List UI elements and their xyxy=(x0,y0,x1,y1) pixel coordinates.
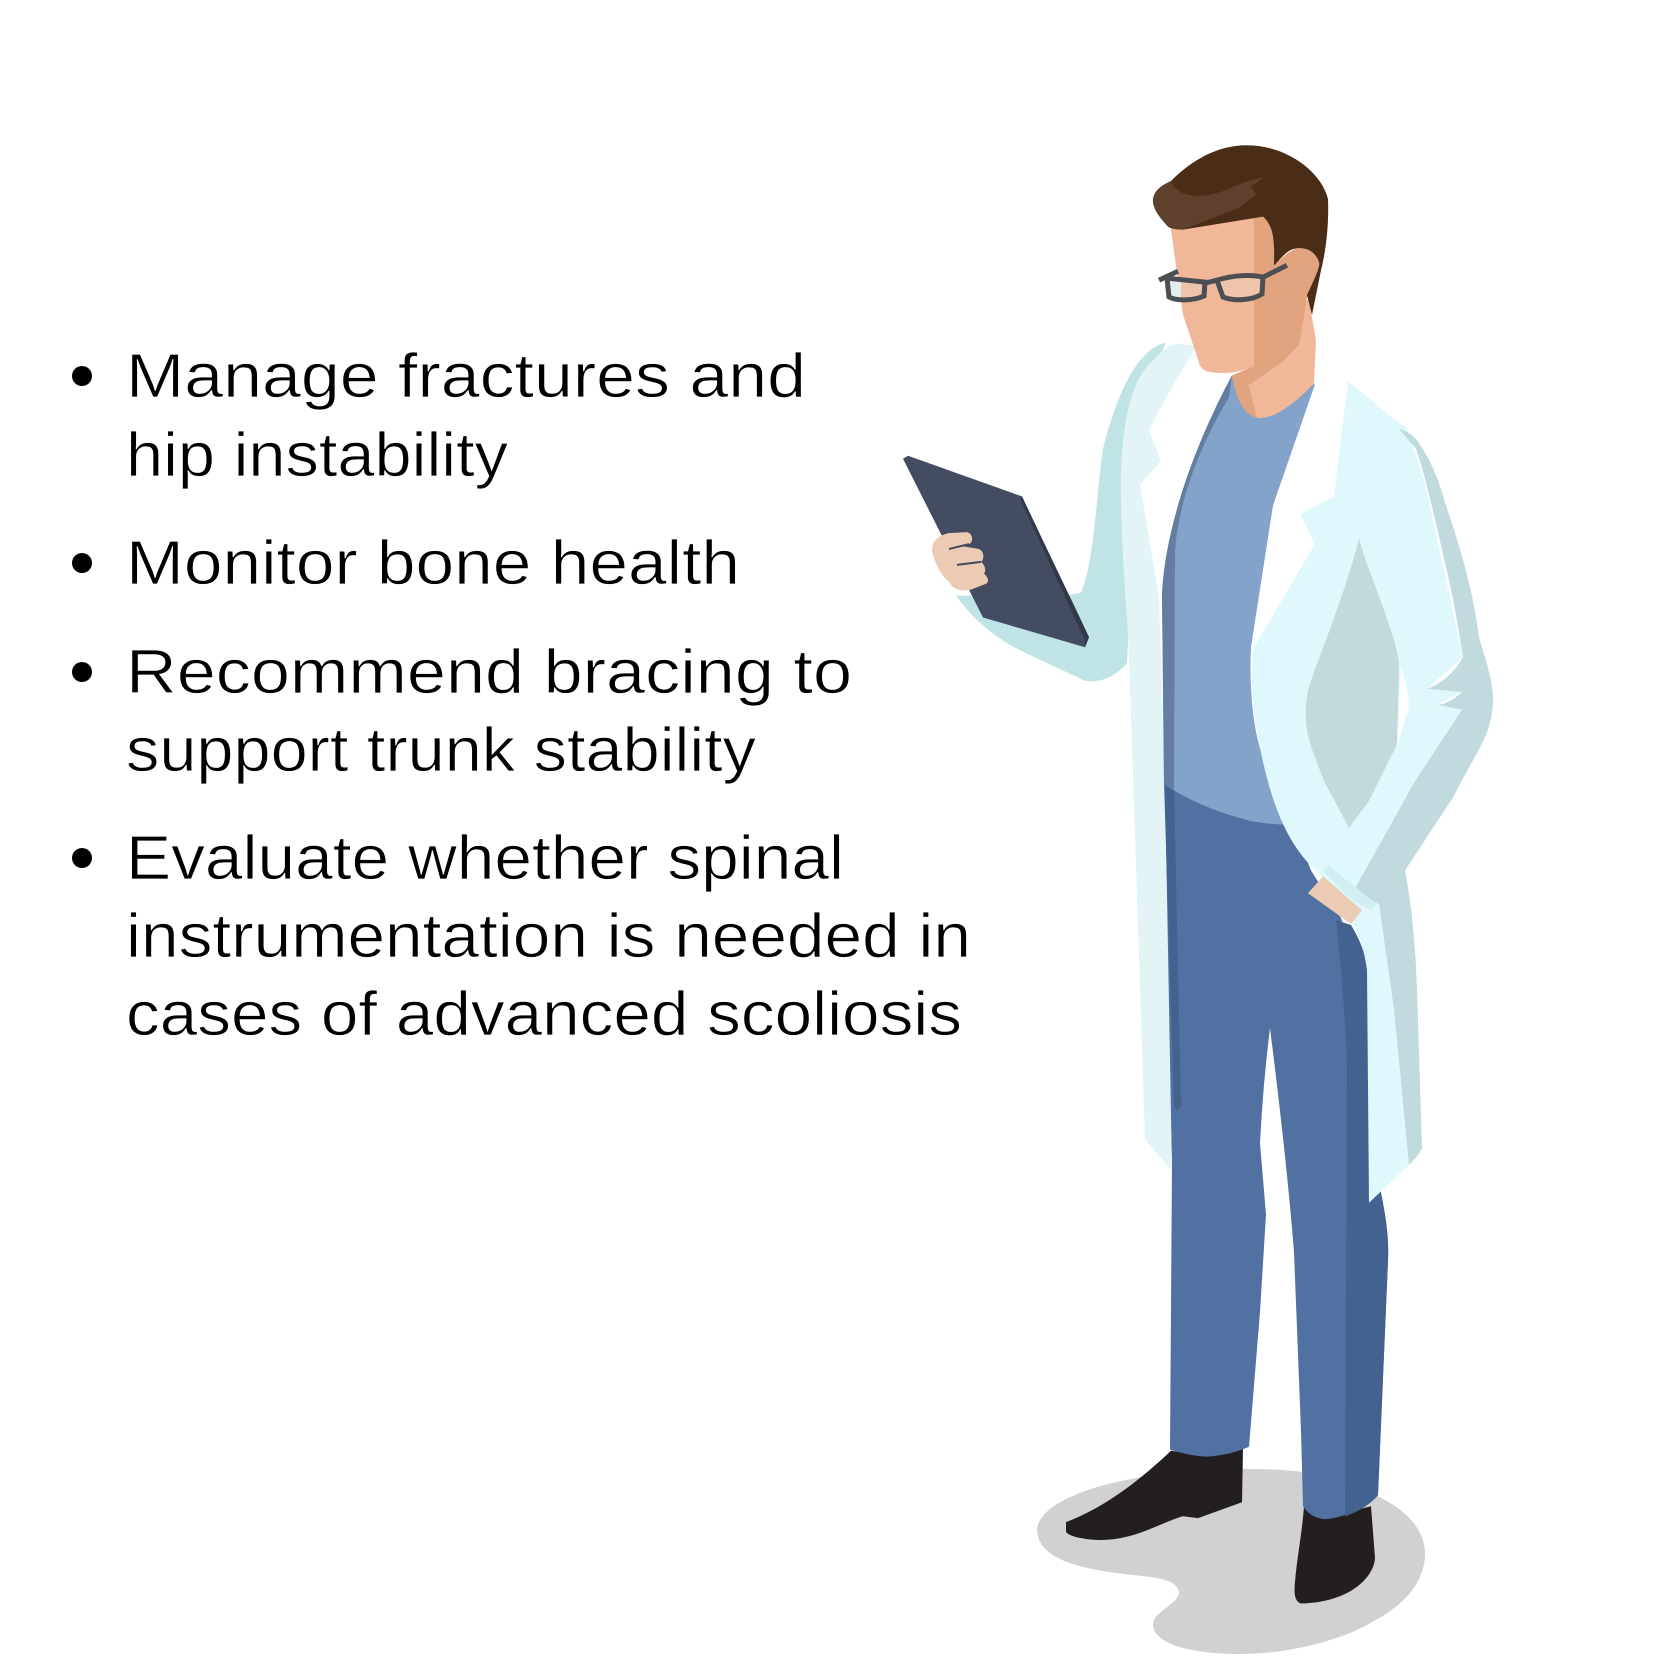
bullet: evaluate spinal instrumentation: cases of advanced scoliosis xyxy=(126,980,962,1049)
bullet: manage fractures: Manage fractures and xyxy=(126,342,806,411)
floor shadow xyxy=(1037,1469,1425,1654)
bullet: evaluate spinal instrumentation: Evaluate whether spinal xyxy=(126,824,844,893)
figure xyxy=(903,145,1493,1603)
shirt xyxy=(1162,375,1315,825)
shirt fold xyxy=(1162,375,1232,790)
trousers shadow xyxy=(1336,920,1388,1516)
panel: bullet list xyxy=(72,342,971,1049)
left shoe xyxy=(1066,1449,1243,1540)
right shoe xyxy=(1295,1506,1375,1603)
gap between arm and coat xyxy=(1397,664,1409,748)
hair xyxy=(1153,145,1328,315)
bullet: monitor bone health: Monitor bone health xyxy=(126,529,740,598)
sleeve cuff xyxy=(1323,864,1377,910)
bullet: recommend bracing: Recommend bracing to xyxy=(126,638,852,707)
trousers xyxy=(1161,776,1388,1519)
coat left sleeve xyxy=(956,343,1166,681)
coat right panel xyxy=(1252,381,1463,1203)
bullet: manage fractures xyxy=(72,342,806,490)
tablet xyxy=(903,456,1089,647)
neck xyxy=(1232,300,1316,418)
head shaded side and ear xyxy=(1232,211,1319,384)
glasses xyxy=(1159,265,1287,300)
hand in pocket xyxy=(1308,876,1362,924)
bullet: recommend bracing: support trunk stability xyxy=(126,716,756,785)
illustration: doctor with tablet xyxy=(903,145,1493,1654)
bullet: evaluate spinal instrumentation: instrumentation is needed in xyxy=(126,902,971,971)
face xyxy=(1169,206,1254,373)
bullet: recommend bracing xyxy=(72,638,852,785)
hair highlight xyxy=(1153,178,1264,230)
trousers inner shadow xyxy=(1164,781,1181,1109)
hand on tablet xyxy=(932,532,988,590)
bullet: evaluate spinal instrumentation xyxy=(72,824,971,1049)
coat left panel xyxy=(1121,344,1197,1171)
neck shadow xyxy=(1232,375,1257,418)
right sleeve shadow xyxy=(1354,429,1493,1165)
bullet: manage fractures: hip instability xyxy=(126,421,508,490)
inner coat shadow xyxy=(1306,538,1399,828)
